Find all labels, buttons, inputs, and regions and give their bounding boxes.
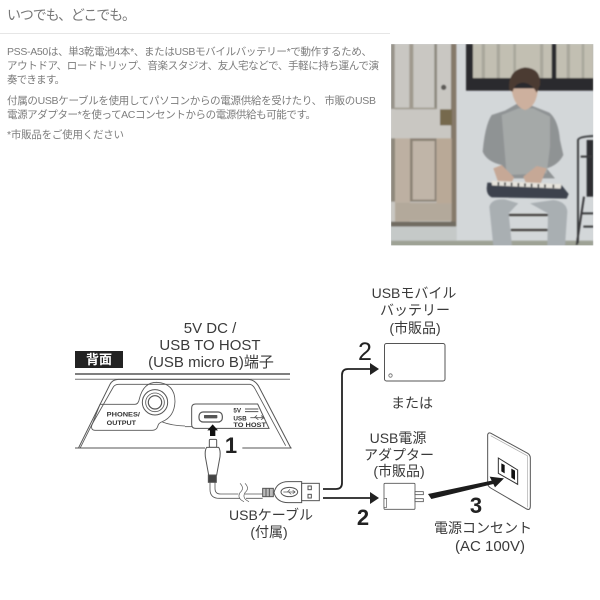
chair at right	[578, 136, 593, 243]
battery label	[372, 285, 456, 336]
usb port recess	[192, 404, 269, 428]
usb cable	[205, 439, 319, 503]
battery label: バッテリー	[380, 302, 450, 318]
port label: 5V DC /	[184, 320, 237, 337]
rear panel: usb port side: TO HOST	[233, 422, 266, 429]
or label: または	[391, 395, 433, 411]
photo: man playing keyboard by a door	[391, 44, 593, 246]
headphone jack	[142, 390, 168, 415]
step number 3: 3	[470, 493, 482, 518]
title: いつでも、どこでも。	[7, 7, 136, 23]
port label: USB TO HOST	[159, 337, 261, 354]
rear panel: usb port side	[185, 379, 292, 448]
text block: intro paragraph: 奏できます。	[7, 74, 65, 86]
rear panel: phones side: PHONES/	[107, 411, 140, 418]
arrow: to usb adapter	[323, 492, 379, 504]
text block: power supply paragraph	[7, 94, 376, 121]
text block: intro paragraph: PSS-A50は、単3乾電池4本*、またはUSBモバイルバッテリー*で動作するため、	[7, 45, 372, 58]
door knob	[441, 85, 446, 90]
battery label: (市販品)	[389, 320, 441, 336]
rear panel: phones side	[75, 379, 185, 448]
cable label	[229, 507, 313, 540]
adapter label	[364, 430, 434, 479]
text block: power supply paragraph: 付属のUSBケーブルを使用してパソコンからの電源供給を受けたり、 市販のUSB	[7, 94, 376, 107]
adapter label: (市販品)	[373, 463, 425, 479]
keyboard	[487, 183, 569, 199]
rear panel: phones side: OUTPUT	[107, 420, 136, 427]
icon: wall outlet	[488, 433, 530, 509]
battery label: USBモバイル	[372, 285, 456, 301]
rear panel label: 背面	[86, 352, 112, 367]
person: hands	[493, 165, 514, 183]
text block: intro paragraph	[7, 45, 380, 86]
step number 2 lower: 2	[357, 505, 369, 530]
rear panel: usb port side: USB	[233, 415, 247, 422]
insert arrow	[207, 424, 218, 436]
door	[391, 44, 456, 227]
adapter label: USB電源	[370, 430, 426, 446]
text block: footnote: *市販品をご使用ください	[7, 128, 124, 141]
step number 1: 1	[225, 433, 237, 458]
window	[466, 44, 593, 91]
adapter label: アダプター	[364, 447, 434, 463]
cable label: USBケーブル	[229, 507, 313, 523]
arrow: to mobile battery	[323, 363, 379, 489]
person: head	[511, 88, 538, 110]
person: trousers and stool	[507, 215, 548, 230]
phones outline	[92, 382, 175, 430]
arrow: adapter to wall outlet	[428, 477, 504, 499]
outlet label	[434, 520, 532, 555]
text block: intro paragraph: アウトドア、ロードトリップ、音楽スタジオ、友人宅などで、手軽に持ち運んで演	[7, 59, 380, 72]
outlet label: (AC 100V)	[455, 538, 525, 555]
port label	[148, 320, 274, 371]
outlet label: 電源コンセント	[434, 520, 532, 536]
step number 2 upper: 2	[358, 338, 372, 366]
person: shirt	[483, 104, 563, 178]
text block: power supply paragraph: 電源アダプター*を使ってACコンセントからの電源供給も可能です。	[7, 108, 316, 121]
rear panel: usb port side: 5V	[233, 408, 242, 415]
icon: mobile battery	[384, 344, 445, 381]
port label: (USB micro B)端子	[148, 354, 274, 371]
icon: usb adapter	[384, 483, 423, 509]
rear panel label	[75, 351, 123, 368]
cable label: (付属)	[250, 524, 288, 540]
